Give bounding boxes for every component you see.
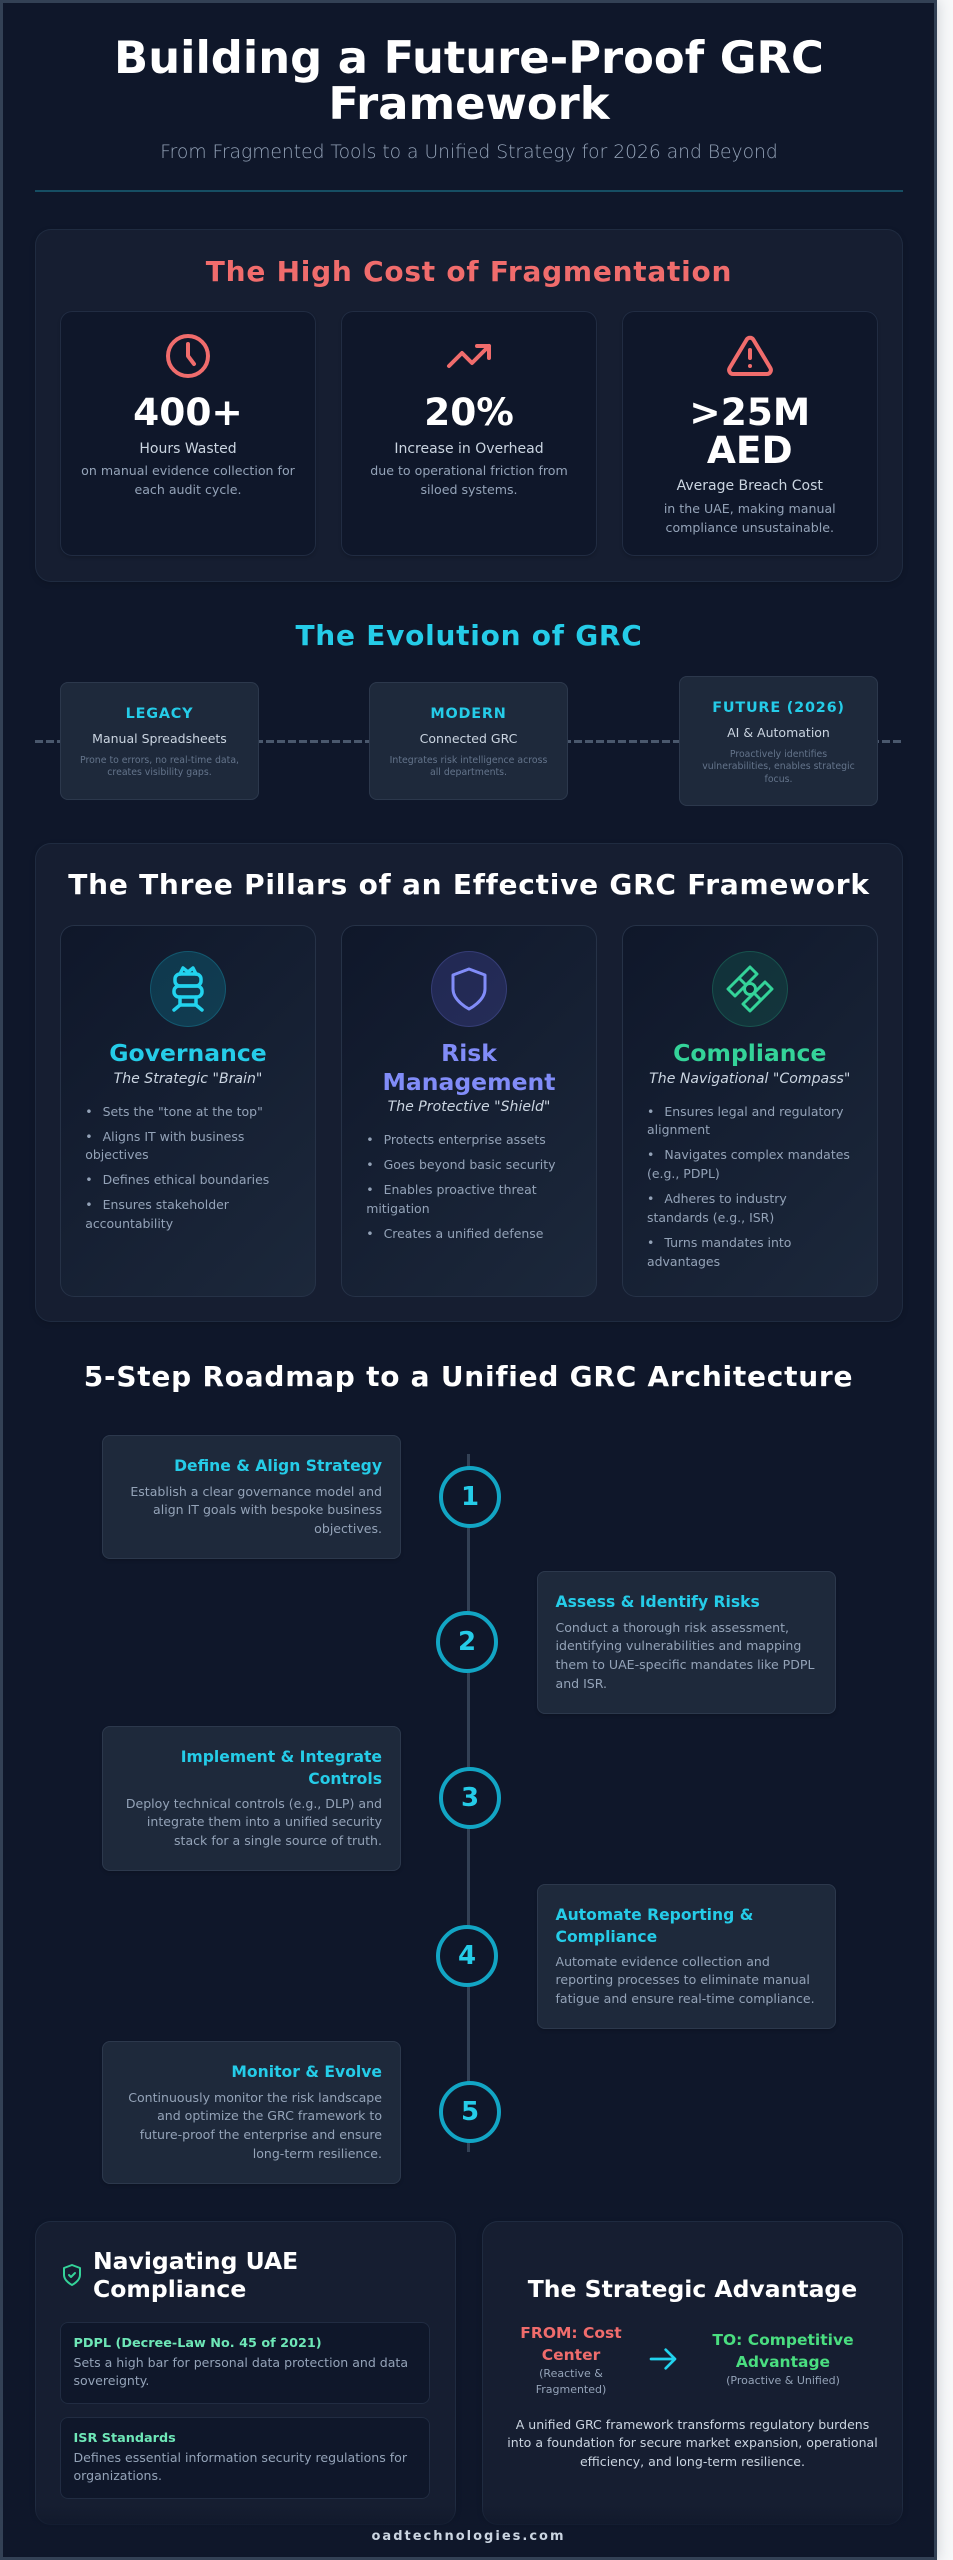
regulation text: organizations. [74,2468,162,2483]
bullet list: objectives [85,1147,149,1162]
step title: Monitor & Evolve [231,2063,382,2081]
icon: shield [431,951,507,1027]
regulation text: sovereignty. [74,2373,149,2388]
pillar name [382,1038,555,1096]
from note: (Reactive & [539,2367,603,2380]
label: Average Breach Cost [677,478,823,494]
bullet list: Goes beyond basic security [384,1157,556,1172]
card note: focus. [765,774,792,785]
timeline card: future [679,676,878,806]
to note: (Proactive & Unified) [726,2374,840,2387]
panel: high cost of fragmentation [35,229,903,582]
description: on manual evidence collection for [81,463,295,478]
step text [556,1954,815,2006]
bullet list: mitigation [366,1201,430,1216]
pillar tagline: The Protective "Shield" [388,1099,550,1115]
icon: clock [166,334,210,378]
panel: three pillars [35,843,903,1322]
heading: The High Cost of Fragmentation [206,254,732,288]
step text [130,1484,382,1536]
step text: Deploy technical controls (e.g., DLP) and [126,1796,382,1811]
step title: Controls [308,1770,382,1788]
step title: Automate Reporting & [556,1906,753,1924]
step text: Automate evidence collection and [556,1954,770,1969]
bullet list: • [647,1104,654,1119]
from title [520,2324,622,2364]
pillar tagline: The Strategic "Brain" [114,1071,262,1087]
description: efficiency, and long-term resilience. [580,2454,805,2469]
description [664,501,836,535]
bullet list: accountability [85,1216,173,1231]
description: each audit cycle. [134,482,242,497]
step 1 number [439,1466,501,1528]
card note: vulnerabilities, enables strategic [702,761,855,772]
description: siloed systems. [420,482,518,497]
value [689,390,810,472]
bullet list: • [85,1172,93,1187]
bullet list: • [85,1197,93,1212]
step text: them to UAE-specific mandates like PDPL [556,1657,814,1672]
from note [536,2367,606,2396]
step 1 card [102,1435,401,1559]
step text: align IT goals with bespoke business [153,1502,382,1517]
step text [128,2090,382,2161]
description: A unified GRC framework transforms regulatory burdens [516,2417,869,2432]
section: roadmap [84,1360,853,2184]
from note: Fragmented) [536,2383,606,2396]
bullet list: advantages [647,1254,720,1269]
step text: stack for a single source of truth. [174,1833,382,1848]
regulation name: PDPL (Decree-Law No. 45 of 2021) [74,2336,322,2351]
value: 20% [424,390,514,434]
label: Increase in Overhead [394,440,544,456]
step text [556,1620,814,1691]
bullet list: Enables proactive threat [384,1182,537,1197]
bullet list: Creates a unified defense [384,1226,543,1241]
icon: brain [150,951,226,1027]
section: evolution of GRC [35,618,901,806]
pillar name: Compliance [673,1038,826,1066]
regulation text: Sets a high bar for personal data protection and data [74,2355,408,2370]
panel: UAE compliance [35,2221,456,2525]
step title: Assess & Identify Risks [556,1593,760,1611]
timeline card: legacy [60,682,259,800]
description [81,463,295,497]
subtitle: From Fragmented Tools to a Unified Strategy for 2026 and Beyond [160,142,778,163]
bullet list: • [366,1157,374,1172]
pillar: compliance [622,925,878,1297]
pillar: risk management [341,925,597,1297]
heading: 5-Step Roadmap to a Unified GRC Architecture [84,1360,853,1392]
icon: shield check [63,2264,81,2286]
step text: Continuously monitor the risk landscape [128,2090,382,2105]
bullet list [366,1132,556,1241]
regulation text [74,2355,408,2388]
heading [93,2247,298,2303]
icon: compass diamonds [712,951,788,1027]
step 5 number [439,2081,501,2143]
card label: AI & Automation [727,725,830,740]
bullet list: • [85,1129,93,1144]
step 5 number: 5 [461,2097,479,2127]
from title: FROM: Cost [520,2324,622,2342]
to title: TO: Competitive [712,2331,854,2349]
pillar name: Risk [441,1038,497,1066]
step text: and ISR. [556,1676,607,1691]
step 4 number: 4 [458,1941,476,1971]
bullet list: Ensures stakeholder [103,1197,229,1212]
bullet list: Turns mandates into [664,1235,791,1250]
step 3 number: 3 [461,1783,479,1813]
step text: long-term resilience. [253,2146,382,2161]
bullet list: • [647,1235,654,1250]
step 4 number [436,1925,498,1987]
bullet list [85,1104,269,1231]
card note: Prone to errors, no real-time data, [80,755,239,766]
pillar name: Management [382,1068,555,1096]
title: Building a Future-Proof GRC [114,30,824,84]
regulation text: Defines essential information security regulations for [74,2450,407,2465]
to title [712,2331,854,2371]
card note [390,755,547,778]
step title: Implement & Integrate [181,1748,382,1766]
value: 400+ [133,390,243,434]
bullet list [647,1104,850,1269]
step text: and optimize the GRC framework to [157,2108,382,2123]
regulation card: PDPL [60,2322,430,2404]
bullet list: Ensures legal and regulatory [664,1104,844,1119]
regulation card: ISR [60,2417,430,2499]
heading: Compliance [93,2275,246,2303]
regulation name: ISR Standards [74,2431,176,2446]
heading: Navigating UAE [93,2247,298,2275]
step title [181,1748,382,1788]
value: >25M [689,390,810,434]
card note: Proactively identifies [730,749,827,760]
bullet list: • [647,1147,654,1162]
step 5 card [102,2041,401,2184]
bullet list: Navigates complex mandates [664,1147,850,1162]
bullet list: Adheres to industry [664,1191,787,1206]
step text [126,1796,382,1848]
step 3 number [439,1767,501,1829]
step 4 card [536,1884,836,2029]
card note: creates visibility gaps. [107,767,212,778]
icon: trending up [446,344,492,368]
step title: Compliance [556,1928,657,1946]
step 2 number [436,1611,498,1673]
bullet list: • [85,1104,93,1119]
description: compliance unsustainable. [666,520,834,535]
title [114,30,824,130]
regulation text [74,2450,407,2483]
step text: objectives. [314,1521,382,1536]
card note: all departments. [430,767,507,778]
footer [3,2505,934,2557]
header [35,30,903,192]
bullet list: Aligns IT with business [103,1129,244,1144]
description: in the UAE, making manual [664,501,836,516]
from block [520,2324,622,2396]
step title [556,1906,753,1946]
description [370,463,568,497]
bullet list: • [366,1132,374,1147]
description: due to operational friction from [370,463,568,478]
heading: The Three Pillars of an Effective GRC Framework [68,868,870,900]
bullet list: • [366,1226,374,1241]
step text: reporting processes to eliminate manual [556,1972,810,1987]
step text: fatigue and ensure real-time compliance. [556,1991,815,2006]
step text: Establish a clear governance model and [130,1484,382,1499]
label: Hours Wasted [139,440,237,456]
stat card: breach cost [622,311,878,556]
stat card: 400+ hours [60,311,316,556]
step text: Conduct a thorough risk assessment, [556,1620,789,1635]
pillar: governance [60,925,316,1297]
heading: The Evolution of GRC [295,618,643,652]
description [507,2417,878,2469]
title: Framework [328,77,610,130]
pillar name: Governance [109,1038,267,1066]
value: AED [707,428,793,472]
bullet list: Protects enterprise assets [384,1132,546,1147]
stat card: 20% overhead [341,311,597,556]
panel: strategic advantage [482,2221,903,2525]
bullet list: Defines ethical boundaries [103,1172,269,1187]
icon: arrow [650,2348,676,2370]
card label: Connected GRC [420,731,517,746]
step title: Define & Align Strategy [174,1457,382,1475]
step 2 number: 2 [458,1627,476,1657]
bullet list: • [366,1182,374,1197]
step 3 card [102,1726,401,1871]
bullet list: • [647,1191,654,1206]
step 1 number: 1 [461,1482,479,1512]
bullet list: standards (e.g., ISR) [647,1210,774,1225]
card title: LEGACY [126,706,193,722]
footer site name: oadtechnologies.com [371,2529,566,2544]
card title: FUTURE (2026) [712,700,845,716]
to block [712,2331,854,2387]
timeline card: modern [369,682,568,800]
bullet list: Sets the "tone at the top" [103,1104,263,1119]
pillar tagline: The Navigational "Compass" [649,1071,850,1087]
card note: Integrates risk intelligence across [390,755,547,766]
heading: The Strategic Advantage [528,2275,857,2303]
step text: integrate them into a unified security [147,1814,382,1829]
card title: MODERN [430,706,507,722]
from title: Center [542,2346,600,2364]
bullet list: alignment [647,1122,710,1137]
step text: identifying vulnerabilities and mapping [556,1638,801,1653]
card note [702,749,855,785]
card label: Manual Spreadsheets [92,731,227,746]
to title: Advantage [736,2353,830,2371]
bullet list: (e.g., PDPL) [647,1166,720,1181]
description: into a foundation for secure market expansion, operational [507,2435,878,2450]
step 2 card [536,1571,836,1714]
step text: future-proof the enterprise and ensure [140,2127,382,2142]
card note [80,755,239,778]
icon: warning triangle [727,336,773,376]
